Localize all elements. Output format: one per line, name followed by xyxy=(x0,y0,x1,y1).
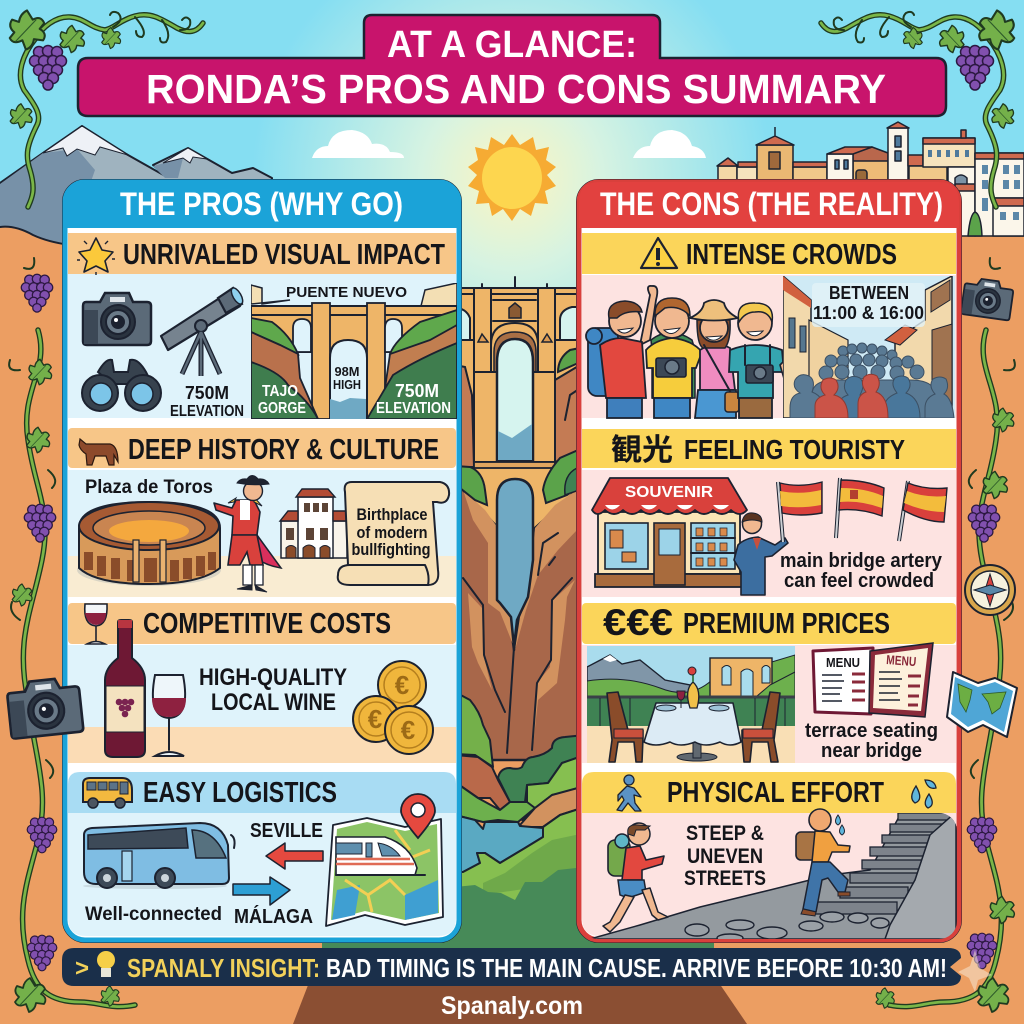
sun xyxy=(468,134,556,221)
illustration: scroll xyxy=(338,482,449,585)
elevation label: ELEVATION xyxy=(376,400,451,417)
icon: light bulb xyxy=(97,951,115,977)
lower bridge band xyxy=(474,462,555,468)
row heading: EASY LOGISTICS xyxy=(143,777,337,809)
title line 1: AT A GLANCE: xyxy=(387,24,637,66)
euro signs xyxy=(368,670,415,745)
row heading: UNRIVALED VISUAL IMPACT xyxy=(123,239,445,271)
arrow: to malaga xyxy=(233,877,290,905)
icon: folded world map xyxy=(947,672,1017,737)
text: terrace seating: terrace seating xyxy=(805,720,938,742)
strip of green above the insight bar xyxy=(322,925,714,951)
label: 750m elevation xyxy=(170,383,244,420)
main arch opening xyxy=(497,339,533,461)
menu headings xyxy=(826,652,917,670)
row heading: PREMIUM PRICES xyxy=(683,608,890,640)
text: time window: 11:00 & 16:00 xyxy=(813,303,924,323)
panel: cons xyxy=(577,180,961,942)
illustration: hiker with backpack xyxy=(603,823,668,932)
scroll text: bullfighting xyxy=(352,541,430,559)
text: time window: BETWEEN xyxy=(829,283,909,303)
insight label: SPANALY INSIGHT: xyxy=(127,953,320,983)
cons heading: THE CONS (THE REALITY) xyxy=(600,186,943,222)
vines left xyxy=(9,12,203,1007)
label: 750m elevation: ELEVATION xyxy=(170,403,244,420)
scroll text: of modern xyxy=(356,524,428,542)
bridge towers and deck xyxy=(455,277,585,462)
label: plaza de toros: Plaza de Toros xyxy=(85,477,213,498)
sparkle near bar end xyxy=(958,950,992,992)
bridge label: PUENTE NUEVO xyxy=(286,284,407,301)
text: bridge artery: can feel crowded xyxy=(784,570,934,592)
icon: bull xyxy=(79,439,118,465)
illustration: menus xyxy=(813,643,933,717)
height label xyxy=(334,367,360,389)
pros heading: THE PROS (WHY GO) xyxy=(120,186,403,222)
pro row 4: easy logistics xyxy=(68,772,456,936)
icon: sweat drops xyxy=(912,780,936,808)
height label: 98M xyxy=(334,364,360,379)
icon: camera xyxy=(83,293,151,345)
scroll text xyxy=(352,506,430,559)
illustration: spanish flags xyxy=(778,478,947,542)
icon: compass xyxy=(965,565,1015,615)
text: bridge artery: main bridge artery xyxy=(780,550,943,572)
illustration: Puente Nuevo bridge and gorge xyxy=(455,277,585,952)
gorge floor greenery and river xyxy=(455,692,585,905)
text: steep and uneven xyxy=(684,822,766,890)
footer site name: Spanaly.com xyxy=(441,992,583,1020)
title banner xyxy=(78,15,946,116)
side cliffs beside pillars xyxy=(455,362,585,467)
illustration: terrace table with bridge view xyxy=(587,646,795,763)
icon: telescope xyxy=(161,286,245,376)
text: local wine: HIGH-QUALITY xyxy=(199,664,347,691)
gorge cliffs xyxy=(455,482,585,760)
elevation label: 750M xyxy=(395,381,439,401)
illustration: bullring xyxy=(77,502,221,586)
chevron: > xyxy=(75,955,89,982)
illustration: matador xyxy=(214,476,281,592)
pro row 2: history and culture xyxy=(68,428,456,597)
text: time window xyxy=(813,283,924,323)
tajo gorge label xyxy=(258,385,306,413)
euro symbols: €€€ xyxy=(603,602,673,643)
ground ridge line xyxy=(0,227,70,245)
panel: pros xyxy=(63,180,461,942)
tajo gorge label: GORGE xyxy=(258,400,306,417)
tourist with hat xyxy=(690,300,739,418)
time window label xyxy=(812,283,925,327)
insight bar xyxy=(62,948,961,986)
icon: wine bottle xyxy=(105,620,145,757)
icon: warning triangle xyxy=(641,238,677,268)
bushes at the bridge foot xyxy=(455,447,585,505)
tourist with backpack xyxy=(586,286,657,418)
label: seville: SEVILLE xyxy=(250,820,323,842)
tourist with camera xyxy=(646,298,702,418)
illustration: tour guide xyxy=(734,513,788,595)
menu headings: MENU xyxy=(886,652,917,669)
icon: map with train and pin xyxy=(326,794,443,926)
illustration: white building xyxy=(280,489,347,558)
tajo gorge label: TAJO xyxy=(262,383,298,400)
tourist waving xyxy=(729,303,802,418)
height label: HIGH xyxy=(333,377,361,392)
title line 2: RONDA’S PROS AND CONS SUMMARY xyxy=(146,66,886,112)
arrow: to seville xyxy=(266,843,323,869)
euro signs: € xyxy=(368,704,382,734)
scroll text: Birthplace xyxy=(356,506,428,524)
icon: walking person xyxy=(617,775,641,811)
background: orange canyon ground xyxy=(0,227,1024,1024)
icon: camera left border xyxy=(6,677,84,739)
shop sign: SOUVENIR xyxy=(625,484,713,501)
illustration: crowded street xyxy=(783,276,955,418)
brown rock base below insight bar xyxy=(293,980,747,1024)
con row 2: feeling touristy xyxy=(582,429,956,597)
row heading: INTENSE CROWDS xyxy=(686,239,897,271)
illustration: puente nuevo xyxy=(251,283,457,419)
con row 4: physical effort xyxy=(582,772,956,942)
pro row 1: unrivaled visual impact xyxy=(68,233,457,420)
illustration: steep steps and cobbles xyxy=(590,812,956,942)
clouds xyxy=(312,130,706,158)
illustration: four tourists xyxy=(586,286,802,418)
text: terrace seating xyxy=(805,720,938,762)
con row 1: intense crowds xyxy=(582,233,956,418)
pro row 3: competitive costs xyxy=(68,603,456,763)
vines right xyxy=(821,12,1015,1007)
label: 750m elevation: 750M xyxy=(185,383,229,403)
illustration: souvenir shop xyxy=(592,478,747,587)
icon: star xyxy=(77,238,115,275)
euro signs: € xyxy=(395,670,409,700)
row heading: DEEP HISTORY & CULTURE xyxy=(128,434,439,466)
text: steep and uneven: STREETS xyxy=(684,867,766,890)
text: local wine: LOCAL WINE xyxy=(211,689,336,716)
text: local wine xyxy=(199,664,347,716)
town on the right xyxy=(717,122,1024,236)
lower arch water xyxy=(497,479,533,647)
icon: coach bus xyxy=(83,823,235,889)
kanji icon: 観光 xyxy=(611,434,673,467)
icon: wine glass xyxy=(152,675,186,756)
row heading: COMPETITIVE COSTS xyxy=(143,608,391,640)
row heading: PHYSICAL EFFORT xyxy=(667,777,884,809)
text: steep and uneven: STEEP & xyxy=(686,822,764,845)
crowd silhouettes xyxy=(790,343,954,418)
bridge side arches xyxy=(455,307,585,340)
icon: euro coins xyxy=(353,661,433,754)
text: terrace seating: near bridge xyxy=(821,740,922,762)
mountains left xyxy=(0,126,272,260)
con row 3: premium prices xyxy=(582,602,956,763)
icon: small wine glass xyxy=(85,604,107,644)
illustration: climber on stairs xyxy=(796,809,850,916)
text: bridge artery xyxy=(780,550,943,592)
label: malaga: MÁLAGA xyxy=(234,905,313,928)
row heading: FEELING TOURISTY xyxy=(684,434,905,465)
menu headings: MENU xyxy=(826,655,860,670)
label: well-connected: Well-connected xyxy=(85,904,222,925)
euro signs: € xyxy=(401,715,415,745)
icon: camera right border xyxy=(961,277,1014,321)
icon: small bus xyxy=(83,778,132,808)
elevation label xyxy=(376,384,450,413)
text: steep and uneven: UNEVEN xyxy=(687,845,763,868)
icon: binoculars xyxy=(82,360,161,411)
